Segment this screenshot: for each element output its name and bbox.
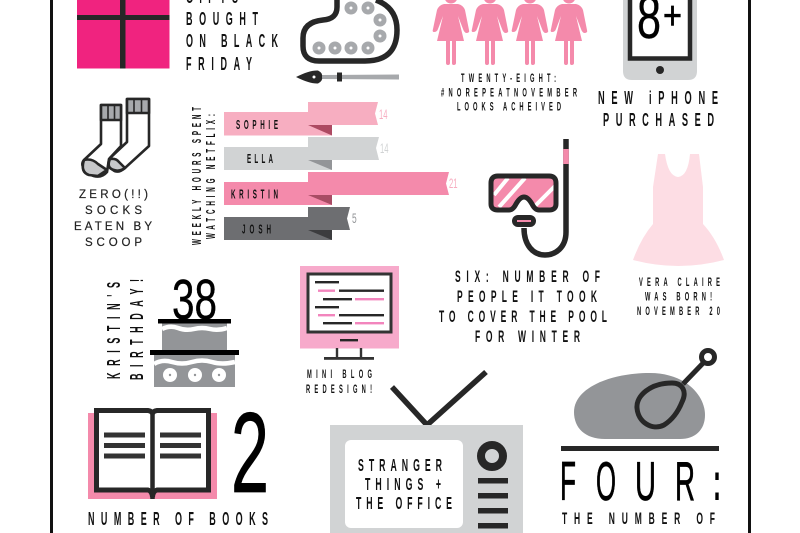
- bar: kristin 21: 21: [449, 177, 458, 192]
- icon: gift box: [77, 0, 170, 68]
- figure 2: [472, 0, 508, 65]
- text: weekly hours spent watching netflix: WATCHING NETFLIX:: [205, 114, 219, 239]
- text: mini blog redesign: REDESIGN!: [306, 383, 372, 396]
- text: stranger things + the office: STRANGER: [358, 455, 442, 475]
- text: new iphone purchased: [598, 89, 718, 131]
- text: vera claire: VERA CLAIRE: [639, 276, 720, 289]
- text: gifts bought on black friday: BOUGHT: [186, 10, 258, 30]
- text: stranger things + the office: THE OFFICE: [356, 493, 452, 513]
- text: mini blog redesign: [306, 368, 372, 396]
- bar: ella 14: ELLA: [247, 153, 273, 167]
- bar: sophie 14: SOPHIE: [236, 119, 278, 133]
- text: six people pool: PEOPLE IT TOOK: [457, 287, 597, 306]
- figure 3: [512, 0, 548, 65]
- bar: sophie 14: 14: [379, 108, 388, 123]
- text: the number of: THE NUMBER OF: [562, 509, 715, 528]
- bar: ella 14: [224, 137, 389, 170]
- text: new iphone purchased: PURCHASED: [603, 111, 714, 131]
- text: gifts bought on black friday: ON BLACK: [186, 32, 278, 52]
- text: stranger things + the office: THINGS +: [365, 474, 441, 494]
- text: six people pool: TO COVER THE POOL: [439, 307, 607, 326]
- icon: turkey: [561, 350, 719, 451]
- icon: birthday cake 38: [150, 268, 239, 387]
- icon: four women: [433, 0, 587, 65]
- text: mini blog redesign: MINI BLOG: [307, 368, 372, 381]
- number: 2 books: 2: [231, 390, 269, 517]
- text: no repeat november: #NOREPEATNOVEMBER: [441, 86, 577, 99]
- ribbon chart: netflix hours: [224, 102, 458, 240]
- bar: ella 14: 14: [380, 142, 389, 157]
- icon: open book: [88, 410, 217, 499]
- bar: kristin 21: KRISTIN: [231, 188, 278, 202]
- text: weekly hours spent watching netflix: WEEKLY HOURS SPENT: [191, 107, 205, 245]
- text: no repeat november: TWENTY-EIGHT:: [461, 72, 556, 85]
- icon: paint palette: [303, 0, 397, 61]
- heading: four: O: [596, 450, 616, 512]
- text: :: [713, 450, 721, 512]
- figure 1: [433, 0, 469, 65]
- icon: socks: [82, 99, 149, 177]
- text: kristin's birthday: BIRTHDAY!: [128, 279, 148, 380]
- heading: four: F: [560, 450, 576, 512]
- bar: sophie 14: [224, 102, 388, 136]
- icon: dress: [633, 154, 724, 266]
- text: vera claire: [637, 276, 720, 318]
- text: no repeat november: LOOKS ACHEIVED: [457, 100, 561, 113]
- bar: kristin 21: [224, 172, 458, 205]
- icon: tv: [330, 372, 523, 533]
- icon: phone: [623, 0, 697, 80]
- text: kristin's birthday: [105, 279, 148, 380]
- icon: snorkel: [491, 139, 569, 255]
- heading: four: R: [675, 450, 695, 512]
- icon: birthday cake 38: 38: [172, 268, 217, 332]
- text: zero socks eaten by scoop: EATEN BY: [74, 221, 152, 233]
- icon: paint brush: [296, 70, 399, 84]
- text: zero socks eaten by scoop: SOCKS: [85, 205, 142, 217]
- bar: josh 5: JOSH: [242, 223, 271, 237]
- text: vera claire: WAS BORN!: [645, 290, 712, 303]
- text: gifts bought on black friday: [186, 0, 278, 75]
- text: vera claire: NOVEMBER 20: [637, 305, 720, 318]
- heading: four: [560, 450, 721, 512]
- text: gifts bought on black friday: FRIDAY: [186, 55, 252, 75]
- heading: four: U: [635, 450, 656, 512]
- text: no repeat november: [441, 72, 577, 113]
- text: new iphone purchased: NEW iPHONE: [598, 89, 718, 109]
- text: stranger things + the office: [356, 455, 452, 513]
- text: zero socks eaten by scoop: ZERO(!!): [79, 189, 148, 201]
- figure 4: [551, 0, 587, 65]
- text: zero socks eaten by scoop: [74, 189, 152, 249]
- bar: josh 5: 5: [352, 212, 357, 227]
- bar: josh 5: [224, 207, 357, 240]
- text: six people pool: SIX: NUMBER OF: [455, 267, 600, 286]
- text: zero socks eaten by scoop: SCOOP: [85, 237, 142, 249]
- text: six people pool: FOR WINTER: [475, 327, 580, 346]
- text: kristin's birthday: KRISTIN'S: [105, 282, 125, 379]
- text: six people pool: [439, 267, 607, 346]
- text: weekly hours spent watching netflix: [191, 107, 219, 245]
- icon: computer monitor: [300, 266, 399, 360]
- text: number of books: NUMBER OF BOOKS: [88, 510, 268, 530]
